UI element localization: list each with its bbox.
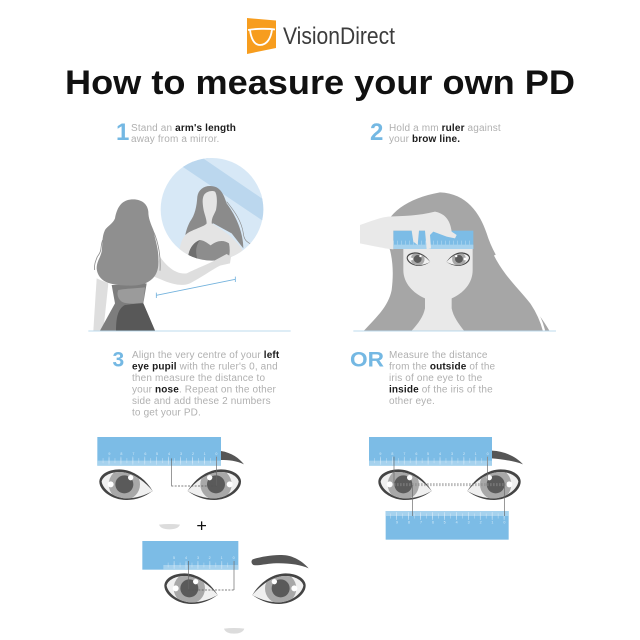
hair highlight — [495, 255, 544, 331]
panel: step 3 — [97, 348, 309, 634]
lower ruler: 4 — [456, 521, 458, 525]
panel: step 2 — [353, 119, 556, 331]
OR label: OR — [350, 348, 384, 372]
OR text: iris of one eye to the — [389, 373, 483, 384]
floor line — [88, 330, 291, 332]
ruler — [393, 231, 473, 249]
top ruler: 2 — [192, 452, 194, 456]
lower ruler: 3 — [197, 556, 199, 560]
step 2 text: brow line. — [412, 134, 460, 145]
top ruler: 8 — [120, 452, 122, 456]
hand — [360, 212, 457, 249]
panel: step 1 — [88, 119, 291, 331]
upper ruler: 8 — [391, 452, 393, 456]
brow — [492, 451, 523, 464]
upper ruler: 0 — [487, 452, 489, 456]
step 3 text: Align the very centre of your — [132, 350, 264, 361]
title: How to measure your own PD — [65, 64, 575, 102]
nose — [159, 524, 180, 529]
upper ruler: 7 — [403, 452, 405, 456]
lower ruler — [142, 541, 238, 570]
step 3 text: then measure the distance to — [132, 373, 265, 384]
face and neck — [403, 247, 473, 331]
lower ruler — [386, 511, 509, 540]
step 3 number: 3 — [112, 348, 124, 372]
top ruler: 6 — [144, 452, 146, 456]
upper ruler: 9 — [379, 452, 381, 456]
lower nose — [224, 628, 244, 634]
step 3 text: nose. Repeat on the other — [155, 384, 276, 396]
lower ruler: 1 — [221, 556, 223, 560]
lower eyes — [164, 573, 306, 604]
top ruler: 0 — [215, 452, 217, 456]
step 1 text: arm's length — [175, 123, 236, 134]
step 1 text: Stand an — [131, 123, 175, 134]
illustration: woman at mirror — [88, 155, 291, 331]
logo — [247, 18, 395, 54]
top ruler: 5 — [156, 452, 158, 456]
lower brow — [251, 555, 309, 568]
near arm — [93, 278, 108, 331]
top ruler: 1 — [204, 452, 206, 456]
panel: or alternative — [350, 348, 523, 540]
illustration: measuring each pupil to nose — [97, 437, 309, 634]
OR text: Measure the distance — [389, 350, 488, 361]
measure lines — [394, 457, 504, 516]
top measure lines — [171, 457, 217, 486]
lower ruler: 5 — [173, 556, 175, 560]
step 2 text: Hold a mm — [389, 123, 442, 134]
step 3 text: to get your PD. — [132, 408, 201, 418]
OR text: from the — [389, 362, 430, 372]
upper ruler: 5 — [427, 452, 429, 456]
illustration: ruler on brow — [353, 192, 556, 331]
top brow — [221, 451, 244, 464]
back hair — [94, 199, 160, 286]
upper ruler: 6 — [415, 452, 417, 456]
upper ruler — [369, 437, 492, 466]
lower ruler: 8 — [408, 521, 410, 525]
mirror — [160, 158, 264, 261]
upper ruler: 4 — [439, 452, 441, 456]
step 1 text: away from a mirror. — [131, 134, 219, 145]
top eyes — [99, 469, 241, 500]
OR text: of the iris of the — [419, 384, 493, 396]
lower ruler: 0 — [233, 556, 235, 560]
floor line — [353, 330, 556, 332]
eyes — [378, 469, 521, 500]
lower ruler: 7 — [420, 521, 422, 525]
step 3 text: your — [132, 384, 155, 396]
step 3 text: left — [264, 350, 280, 361]
lower ruler: 3 — [468, 521, 470, 525]
lower ruler: 9 — [396, 521, 398, 525]
lower ruler: 2 — [209, 556, 211, 560]
dotted distance line — [394, 480, 507, 489]
OR text: other eye. — [389, 396, 435, 407]
lower ruler: 2 — [480, 521, 482, 525]
logo mark — [247, 18, 276, 54]
eyes — [407, 252, 470, 266]
step 3 text: eye pupil — [132, 362, 177, 372]
step 1 number: 1 — [116, 119, 129, 146]
step 2 text: ruler against — [442, 123, 501, 134]
upper ruler: 1 — [475, 452, 477, 456]
top ruler: 9 — [108, 452, 110, 456]
lower ruler: 6 — [432, 521, 434, 525]
top ruler: 3 — [180, 452, 182, 456]
lower ruler: 5 — [444, 521, 446, 525]
lower ruler: 1 — [491, 521, 493, 525]
step 3 text: with the ruler's 0, and — [177, 362, 278, 372]
torso and skirt — [100, 283, 155, 331]
illustration: iris to iris measure — [369, 437, 523, 540]
top ruler: 4 — [168, 452, 170, 456]
OR text: outside of the — [430, 362, 495, 372]
lower ruler: 0 — [503, 521, 505, 525]
logo wordmark: VisionDirect — [283, 23, 395, 50]
plus sign: + — [196, 516, 207, 536]
top ruler — [97, 437, 221, 466]
far arm and hand — [154, 254, 231, 285]
top ruler: 7 — [132, 452, 134, 456]
step 2 text: your — [389, 134, 412, 145]
lower measure lines — [188, 561, 234, 590]
arm's length measure — [156, 277, 235, 298]
upper ruler: 3 — [451, 452, 453, 456]
hair — [364, 192, 549, 331]
step 3 text: side and add these 2 numbers — [132, 396, 271, 407]
OR text: inside — [389, 384, 419, 396]
lower ruler: 4 — [185, 556, 187, 560]
upper ruler: 2 — [463, 452, 465, 456]
step 2 number: 2 — [370, 119, 383, 146]
